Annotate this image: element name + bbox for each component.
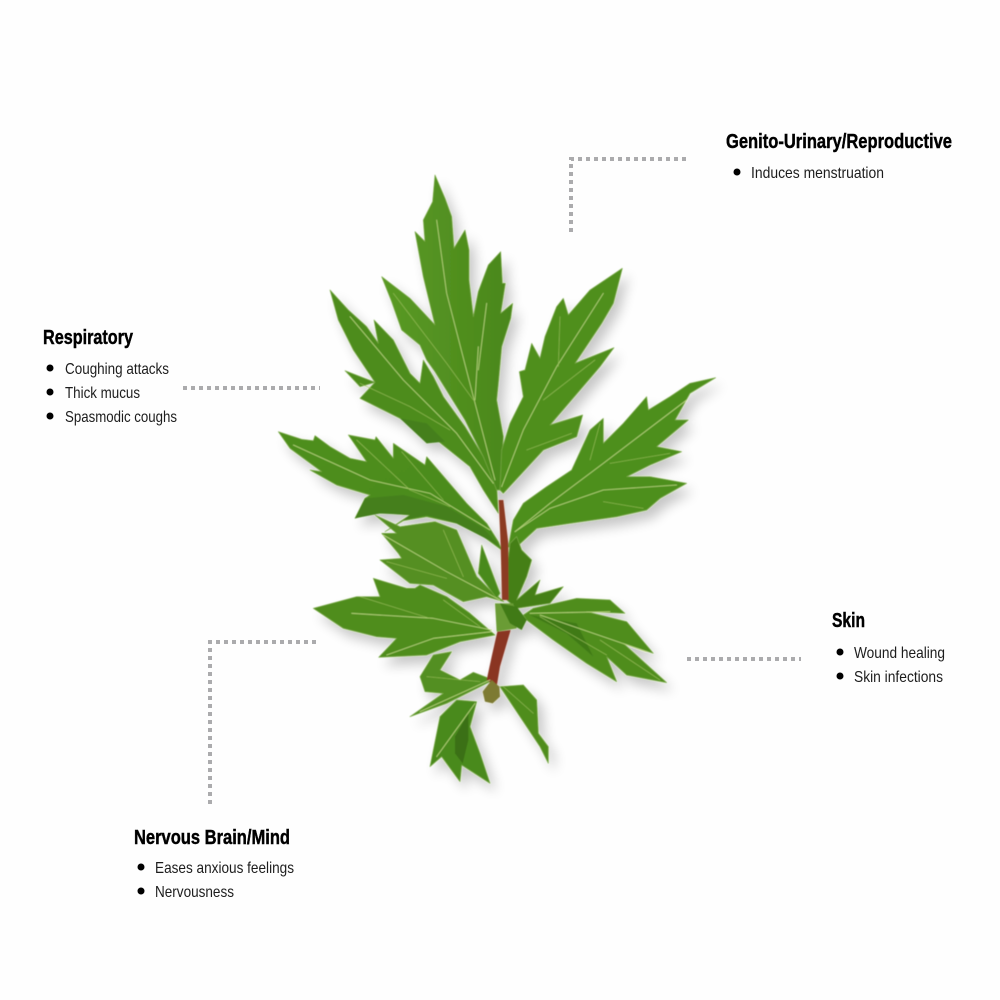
leaf: bottom right — [500, 685, 548, 763]
heading: Skin — [832, 610, 865, 632]
bullet list: Spasmodic coughs — [65, 409, 177, 426]
lower leaf veins — [352, 530, 660, 757]
panel: skin — [832, 610, 945, 686]
bullet list: Skin infections — [854, 669, 943, 686]
leaf: central — [382, 175, 513, 490]
plant illustration — [278, 175, 716, 783]
leaf: bottom centre — [430, 700, 490, 783]
stem — [499, 500, 509, 600]
bullet list: Eases anxious feelings — [155, 860, 294, 877]
connector: genito-urinary — [571, 159, 686, 236]
bullet list: Nervousness — [155, 884, 234, 901]
bullet list: Induces menstruation — [751, 165, 884, 182]
heading: Respiratory — [43, 327, 134, 349]
leaf: mid left upper — [375, 515, 504, 602]
connector: respiratory — [183, 386, 320, 390]
bullet list: Coughing attacks — [65, 361, 169, 378]
leaf: small lobes by stem — [478, 545, 500, 598]
bullet list — [138, 860, 294, 901]
leaf fold — [400, 418, 445, 443]
leaf: mid right — [523, 598, 667, 683]
leaf: bottom left curled — [410, 652, 493, 717]
panel: genito-urinary — [726, 131, 952, 182]
leaf: mid left lower — [313, 578, 495, 657]
leaf: right — [508, 378, 716, 550]
heading: Nervous Brain/Mind — [134, 827, 290, 849]
panel: respiratory — [43, 327, 177, 426]
leaf: far left — [278, 432, 502, 550]
bullet list — [836, 645, 945, 686]
connector: nervous — [210, 642, 316, 805]
heading: Genito-Urinary/Reproductive — [726, 131, 952, 153]
leaf veins — [293, 220, 687, 532]
upper leaves — [278, 175, 716, 550]
leaf: upper left — [330, 290, 498, 513]
connector: skin — [687, 657, 801, 661]
lower leaves and stem — [313, 500, 667, 783]
bullet list: Thick mucus — [65, 385, 140, 402]
bullet list: Wound healing — [854, 645, 945, 662]
leaf: upper right — [500, 268, 622, 493]
bullet list — [46, 361, 177, 426]
panel: nervous brain/mind — [134, 827, 294, 901]
